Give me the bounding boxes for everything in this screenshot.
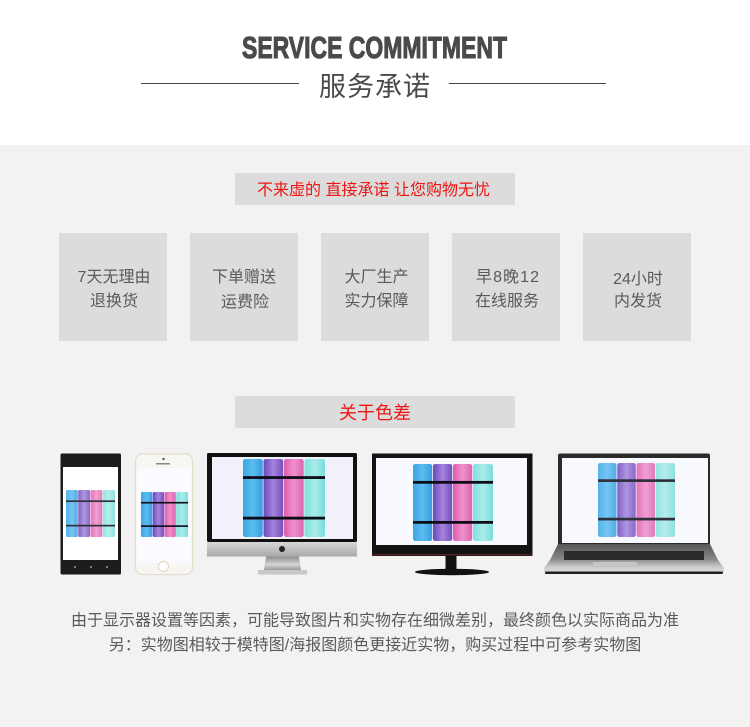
- icon: black phone: [60, 454, 121, 574]
- banner: colour difference: [235, 396, 515, 428]
- Chinese heading: 服务承诺: [319, 72, 431, 102]
- English heading: SERVICE COMMITMENT: [242, 30, 507, 65]
- icon: laptop: [544, 454, 724, 574]
- icon: desktop computer: [207, 453, 357, 574]
- icon: white phone: [136, 454, 192, 574]
- panel: free shipping insurance: 运费险: [221, 293, 269, 311]
- panel: online service: 在线服务: [475, 292, 539, 310]
- text block: disclaimer: [71, 612, 679, 654]
- panel: free shipping insurance: 下单赠送: [212, 268, 276, 286]
- panel: 7 day returns: 7天无理由: [78, 268, 150, 286]
- panel: online service: [452, 233, 560, 341]
- banner: promise: [235, 173, 515, 205]
- banner: promise: 不来虚的 直接承诺 让您购物无忧: [257, 181, 490, 199]
- panel: 7 day returns: [59, 233, 167, 341]
- text block: disclaimer: 另：实物图相较于模特图/海报图颜色更接近实物，购买过程中可参考实物图: [109, 636, 641, 654]
- panel: factory production: 实力保障: [344, 292, 409, 310]
- text block: disclaimer: 由于显示器设置等因素，可能导致图片和实物存在细微差别，最终颜色以实际商品为准: [71, 612, 679, 630]
- panel: 24 hour shipping: 内发货: [614, 292, 662, 310]
- panel: 24 hour shipping: 24小时: [613, 270, 663, 288]
- panel: factory production: [321, 233, 429, 341]
- panel: factory production: 大厂生产: [344, 268, 409, 286]
- panel: free shipping insurance: [190, 233, 298, 341]
- icon: monitor: [372, 454, 532, 575]
- panel: 7 day returns: 退换货: [90, 292, 138, 310]
- title: [141, 30, 606, 102]
- banner: colour difference: 关于色差: [339, 403, 411, 423]
- panel: 24 hour shipping: [583, 233, 691, 341]
- panel: online service: 早8晚12: [476, 268, 539, 286]
